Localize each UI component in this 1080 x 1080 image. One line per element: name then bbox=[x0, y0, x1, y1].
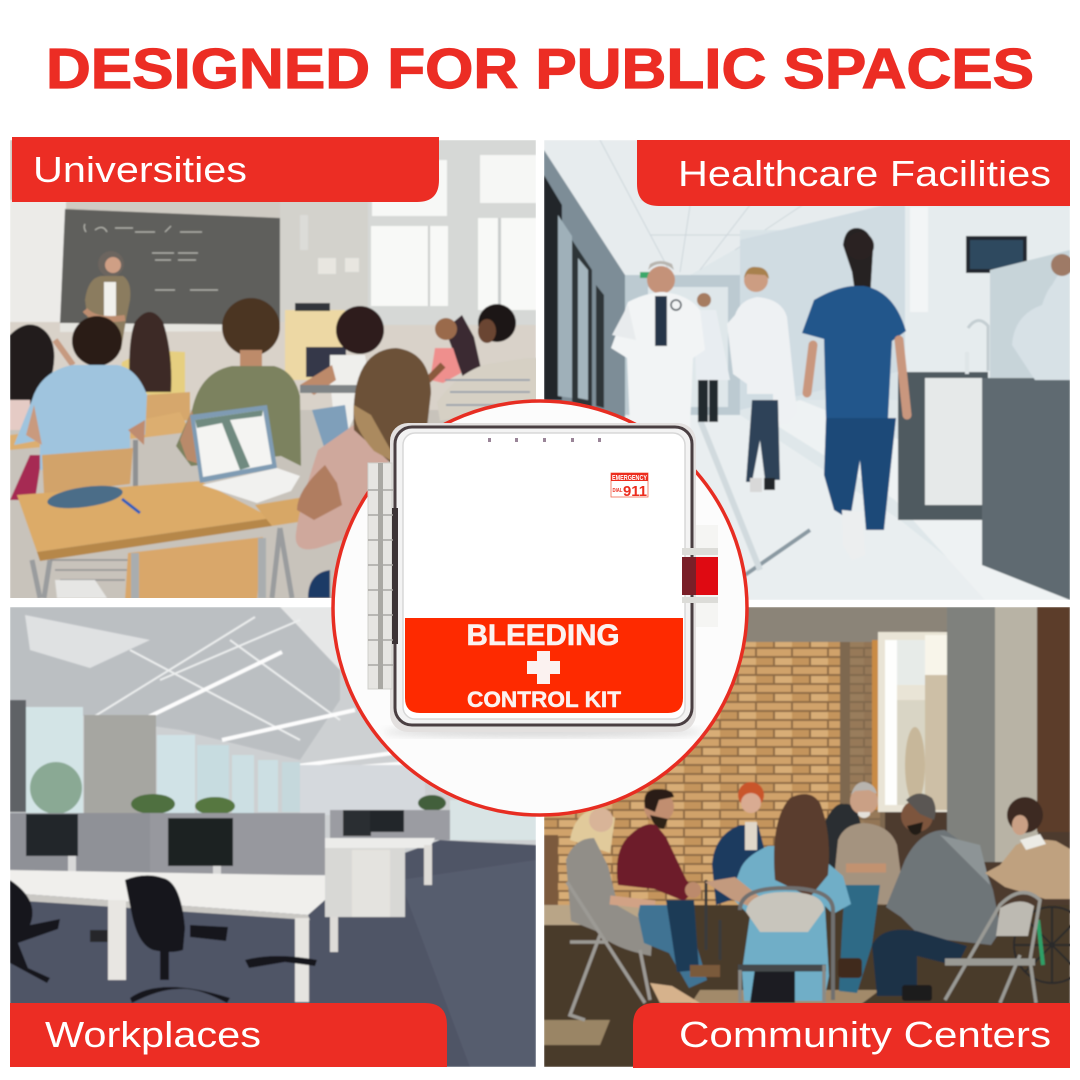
folding chair right bbox=[945, 893, 1040, 1003]
kit label: bleeding: BLEEDING bbox=[466, 619, 620, 652]
panel: healthcare facilities corridor photo bbox=[544, 140, 1073, 600]
front chair bbox=[125, 537, 263, 600]
laptop bbox=[190, 405, 300, 503]
label: universities: Universities bbox=[33, 149, 247, 190]
student with long dark hair far left bbox=[10, 325, 73, 500]
emergency 911 sticker: DIAL bbox=[612, 488, 622, 494]
woman from behind with long hair bbox=[705, 794, 851, 1003]
emergency 911 sticker: EMERGENCY bbox=[612, 473, 647, 482]
partitions and monitors bbox=[10, 809, 450, 876]
folding chair left bbox=[567, 882, 650, 1020]
emergency 911 sticker: 911 bbox=[623, 483, 647, 500]
pencil case bbox=[46, 484, 124, 510]
wheelchair bbox=[1014, 907, 1080, 983]
left wall dark doors bbox=[544, 150, 625, 420]
student olive shirt bbox=[176, 298, 301, 466]
window bbox=[878, 632, 948, 812]
student centre long hair bbox=[118, 312, 185, 397]
woman doctor bbox=[727, 267, 797, 492]
right side cabinet and counter bbox=[898, 207, 1073, 600]
icon: white cross bbox=[527, 651, 560, 684]
carpet floor bbox=[10, 840, 536, 1067]
panel: universities classroom photo bbox=[10, 140, 537, 600]
older man in beige bbox=[834, 782, 902, 993]
stacked chairs behind bbox=[824, 803, 861, 870]
white desks and cabinet bbox=[10, 838, 435, 1002]
circle badge with bleeding control kit bbox=[333, 401, 747, 815]
kit label: control kit: CONTROL KIT bbox=[467, 687, 622, 712]
left hinge bbox=[368, 463, 398, 689]
student blue shirt bbox=[14, 316, 147, 470]
label: workplaces: Workplaces bbox=[45, 1014, 261, 1055]
panel: community centers group photo bbox=[544, 607, 1080, 1067]
red haired woman bbox=[706, 782, 766, 960]
pillar and dark brick wall bbox=[947, 607, 1070, 862]
man in grey shirt bbox=[872, 793, 1001, 1001]
girl in pink and striped shirt student bbox=[428, 304, 537, 421]
kit case bbox=[390, 423, 696, 732]
title: DESIGNED FOR PUBLIC SPACES bbox=[46, 37, 1034, 101]
teacher bbox=[85, 251, 130, 350]
front desk bbox=[17, 481, 272, 552]
woman with brown hair on the right bbox=[985, 797, 1070, 899]
label: workplaces bbox=[10, 1003, 447, 1067]
chair behind pencil case bbox=[42, 448, 133, 494]
woman in grey, blonde bbox=[566, 808, 707, 1003]
yellow chair and desk middle bbox=[145, 392, 190, 425]
panel: workplaces office photo bbox=[10, 607, 536, 1067]
male doctor in white coat bbox=[611, 261, 705, 428]
far doctor bbox=[694, 293, 730, 422]
nurse in navy scrubs bbox=[802, 228, 907, 560]
label: universities bbox=[12, 137, 439, 202]
label: healthcare facilities bbox=[637, 140, 1070, 206]
front student with bob hair bbox=[296, 348, 431, 549]
office chairs bbox=[10, 875, 317, 1003]
emergency 911 sticker bbox=[611, 473, 648, 500]
label: community centers bbox=[633, 1003, 1070, 1068]
right latch bbox=[682, 525, 718, 627]
white shirt student with laptop bbox=[300, 306, 384, 450]
label: healthcare facilities: Healthcare Facilities bbox=[678, 153, 1051, 194]
label: community centers: Community Centers bbox=[679, 1014, 1051, 1055]
man in maroon sweater bbox=[617, 789, 720, 977]
